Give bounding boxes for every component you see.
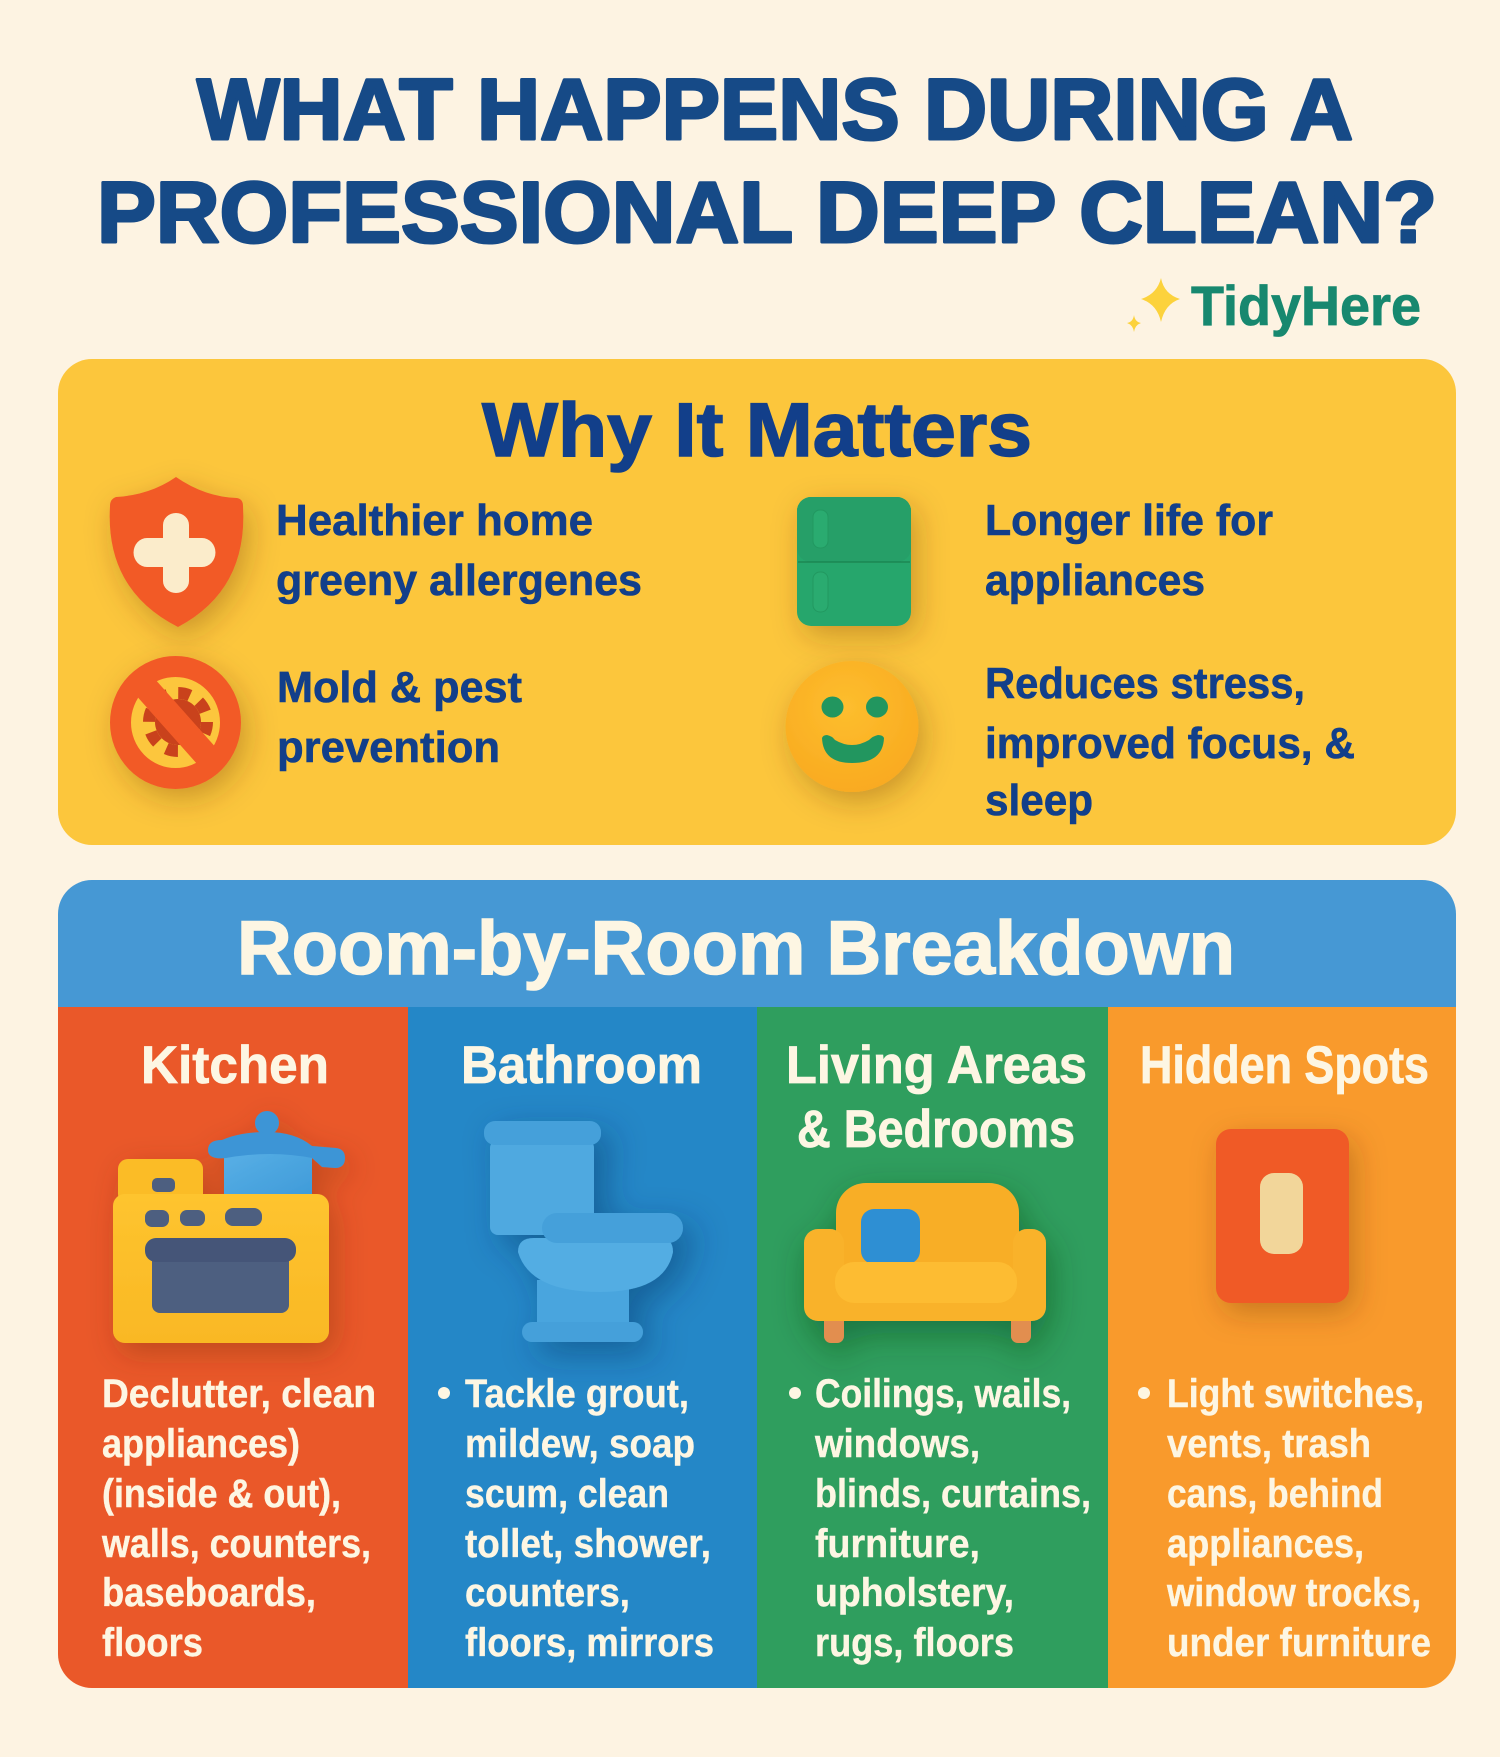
bullet	[438, 1387, 450, 1399]
heading: hidden spots: Hidden Spots	[1140, 1036, 1429, 1095]
bullet	[1138, 1387, 1150, 1399]
icon: no-mold sign	[120, 666, 230, 778]
column: living areas and bedrooms	[786, 1036, 1091, 1665]
icon: shield with cross	[110, 477, 243, 627]
heading: living areas and bedrooms	[786, 1036, 1087, 1159]
heading: kitchen: Kitchen	[141, 1036, 329, 1095]
text: healthier home: Healthier home	[276, 496, 593, 545]
text: living area tasks: rugs, floors	[815, 1621, 1014, 1665]
title: PROFESSIONAL DEEP CLEAN?	[97, 165, 1437, 261]
text: hidden spot tasks	[1166, 1372, 1431, 1665]
panel: room-by-room breakdown	[58, 880, 1456, 1688]
text: kitchen tasks	[101, 1372, 376, 1665]
heading: bathroom: Bathroom	[461, 1036, 702, 1095]
text: kitchen tasks: floors	[102, 1621, 203, 1665]
text: reduces stress: Reduces stress,	[985, 659, 1305, 708]
text: living area tasks: Coilings, wails,	[815, 1372, 1071, 1416]
text: bathroom tasks: floors, mirrors	[465, 1621, 714, 1665]
icon: sofa	[804, 1183, 1046, 1343]
text: hidden spot tasks: Light switches,	[1167, 1372, 1424, 1416]
icon: green fridge	[797, 497, 911, 626]
text: reduces stress: sleep	[985, 776, 1093, 825]
text: bathroom tasks: Tackle grout,	[465, 1372, 689, 1416]
text: living area tasks: upholstery,	[815, 1571, 1014, 1615]
text: hidden spot tasks: vents, trash	[1167, 1422, 1371, 1466]
bullet	[789, 1387, 801, 1399]
text: kitchen tasks: walls, counters,	[101, 1522, 371, 1566]
text: bathroom tasks	[465, 1372, 714, 1665]
panel: why it matters	[58, 359, 1456, 845]
text: kitchen tasks: (inside & out),	[102, 1472, 341, 1516]
text: kitchen tasks: Declutter, clean	[102, 1372, 376, 1416]
icon: stove with pot	[113, 1111, 345, 1343]
icon: toilet	[484, 1121, 683, 1342]
text: bathroom tasks: tollet, shower,	[465, 1522, 711, 1566]
column backgrounds and header band	[58, 880, 1456, 1688]
heading: why it matters: Why It Matters	[482, 388, 1032, 473]
text: kitchen tasks: appliances)	[102, 1422, 300, 1466]
icon: smiley face	[786, 661, 918, 792]
column: kitchen	[101, 1036, 376, 1665]
text: bathroom tasks: scum, clean	[465, 1472, 669, 1516]
text: living area tasks: furniture,	[815, 1522, 980, 1566]
title	[97, 62, 1437, 261]
text: hidden spot tasks: cans, behind	[1167, 1472, 1383, 1516]
icon: light switch	[1216, 1129, 1349, 1303]
heading: room-by-room breakdown: Room-by-Room Breakdown	[237, 906, 1235, 991]
text: longer life	[985, 496, 1273, 605]
column: bathroom	[438, 1036, 714, 1665]
text: hidden spot tasks: window trocks,	[1166, 1571, 1421, 1615]
logo: TidyHere: TidyHere	[1191, 274, 1421, 337]
text: mold and pest	[277, 663, 522, 772]
column: hidden spots	[1138, 1036, 1431, 1665]
text: bathroom tasks: counters,	[465, 1571, 630, 1615]
text: hidden spot tasks: under furniture	[1167, 1621, 1431, 1665]
text: living area tasks: windows,	[814, 1422, 980, 1466]
text: kitchen tasks: baseboards,	[102, 1571, 316, 1615]
text: bathroom tasks: mildew, soap	[465, 1422, 695, 1466]
text: longer life: appliances	[985, 556, 1205, 605]
heading: living areas and bedrooms: & Bedrooms	[797, 1100, 1075, 1159]
text: reduces stress: improved focus, &	[985, 719, 1355, 768]
title: WHAT HAPPENS DURING A	[197, 62, 1353, 158]
text: living area tasks: blinds, curtains,	[815, 1472, 1091, 1516]
text: reduces stress	[985, 659, 1355, 825]
text: mold and pest: Mold & pest	[277, 663, 522, 712]
text: healthier home: greeny allergenes	[276, 556, 642, 605]
text: mold and pest: prevention	[277, 723, 500, 772]
text: healthier home	[276, 496, 642, 605]
heading: living areas and bedrooms: Living Areas	[786, 1036, 1087, 1095]
text: hidden spot tasks: appliances,	[1167, 1522, 1364, 1566]
text: longer life: Longer life for	[985, 496, 1273, 545]
text: living area tasks	[814, 1372, 1091, 1665]
